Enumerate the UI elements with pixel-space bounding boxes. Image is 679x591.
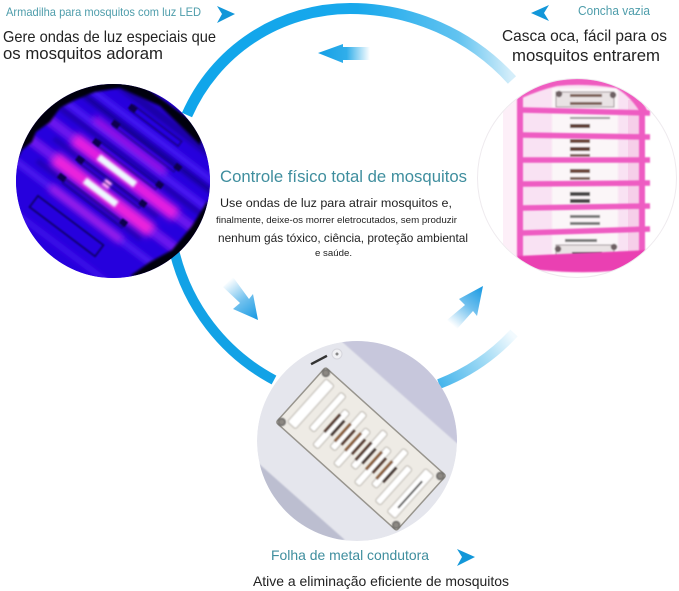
blue circular arc, bottom left xyxy=(174,250,274,380)
text: shell description xyxy=(502,28,667,65)
small arrow: top left xyxy=(217,6,235,23)
pink cage bars xyxy=(520,90,650,268)
arrow: large pointing down-right xyxy=(223,277,258,320)
upper-right lavender panel xyxy=(340,340,460,446)
blue circular arc, top xyxy=(187,8,512,115)
metal plate xyxy=(276,367,446,531)
screws xyxy=(277,368,445,530)
blue bands xyxy=(16,84,210,278)
text: metal sheet description: Ative a eliminação eficiente de mosquitos xyxy=(253,573,509,589)
lower-left lavender panel xyxy=(257,462,345,540)
small arrow: top right xyxy=(531,5,549,21)
central body text: finalmente, deixe-os morrer eletrocutados, sem produzir xyxy=(216,214,457,225)
white streaks xyxy=(80,154,137,209)
text: LED description: os mosquitos adoram xyxy=(3,44,163,63)
black rim shadows xyxy=(18,84,202,162)
small arrow: bottom xyxy=(457,549,475,566)
text: shell description: mosquitos entrarem xyxy=(512,47,660,65)
dark outlines of the grid xyxy=(28,104,184,258)
photo: pink empty shell xyxy=(478,78,676,278)
central heading: Controle físico total de mosquitos xyxy=(220,167,467,186)
text: shell description: Casca oca, fácil para os xyxy=(502,28,667,45)
magenta glow xyxy=(44,112,184,247)
photo: LED lamp glowing blue xyxy=(16,84,210,278)
central body text xyxy=(216,196,468,258)
label: LED trap: Armadilha para mosquitos com luz LED xyxy=(6,5,201,19)
central body text: nenhum gás tóxico, ciência, proteção ambiental xyxy=(218,231,468,245)
arrow: large pointing up-right xyxy=(447,286,483,329)
label: conductive metal sheet: Folha de metal condutora xyxy=(271,547,429,563)
central body text: e saúde. xyxy=(315,248,352,258)
white inner plate xyxy=(552,88,618,266)
dark element strips xyxy=(323,413,399,485)
fading circular arc, bottom right xyxy=(439,333,514,384)
photo: conductive metal sheet xyxy=(257,340,460,541)
central body text: Use ondas de luz para atrair mosquitos e, xyxy=(220,196,452,210)
serpentine slots xyxy=(287,379,434,519)
arrow: large pointing left xyxy=(318,44,370,63)
label: empty shell: Concha vazia xyxy=(578,4,650,18)
text: LED description: Gere ondas de luz especiais que xyxy=(3,29,216,46)
text: LED description xyxy=(3,29,216,63)
